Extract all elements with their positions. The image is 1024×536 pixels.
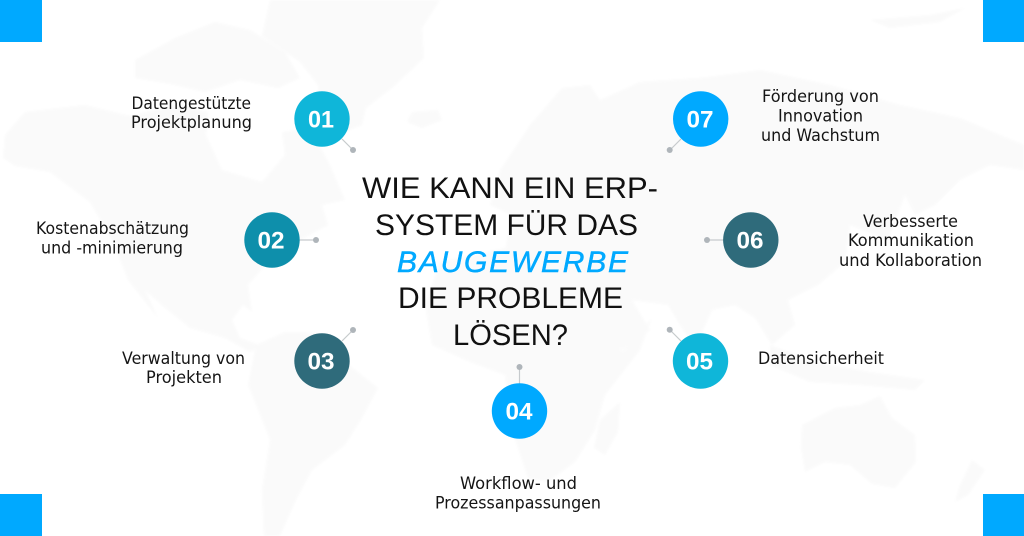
item 01: Datengestützte	[132, 94, 251, 113]
item 04: 04	[506, 398, 533, 426]
item 03: 03	[308, 348, 334, 376]
item 06: Kommunikation	[848, 231, 974, 250]
item 03: Projekten	[146, 368, 222, 387]
item 07: und Wachstum	[761, 126, 880, 145]
item 02: 02	[258, 228, 284, 254]
item 02: Kostenabschätzung	[36, 219, 189, 238]
item 05	[667, 327, 885, 389]
item 04: Workflow- und	[460, 474, 577, 493]
item 07: 07	[686, 106, 714, 134]
title: WIE KANN EIN ERP-	[362, 172, 658, 205]
item 01	[131, 91, 356, 153]
item 07	[667, 87, 880, 153]
item 04	[435, 364, 601, 512]
corner square: top right	[983, 0, 1024, 42]
title: DIE PROBLEME	[398, 282, 623, 315]
item 06	[704, 212, 982, 270]
item 07: Innovation	[778, 106, 863, 126]
item 01: 01	[308, 106, 334, 134]
title: SYSTEM FÜR DAS	[375, 209, 638, 242]
item 03	[122, 327, 356, 389]
item 02: und -minimierung	[41, 238, 183, 258]
corner square: top left	[0, 0, 42, 42]
item 03: Verwaltung von	[122, 349, 245, 368]
item 02	[36, 212, 319, 268]
corner square: bottom left	[0, 494, 42, 536]
item 06: 06	[736, 228, 764, 254]
title: BAUGEWERBE	[397, 246, 629, 279]
title	[362, 172, 658, 352]
item 05: Datensicherheit	[758, 349, 885, 368]
item 01: Projektplanung	[131, 113, 252, 132]
item 04: Prozessanpassungen	[435, 494, 601, 512]
item 06: und Kollaboration	[839, 251, 982, 270]
corner square: bottom right	[983, 494, 1024, 536]
title: LÖSEN?	[453, 319, 568, 352]
item 07: Förderung von	[762, 87, 879, 106]
item 05: 05	[686, 348, 713, 376]
item 06: Verbesserte	[863, 212, 958, 231]
